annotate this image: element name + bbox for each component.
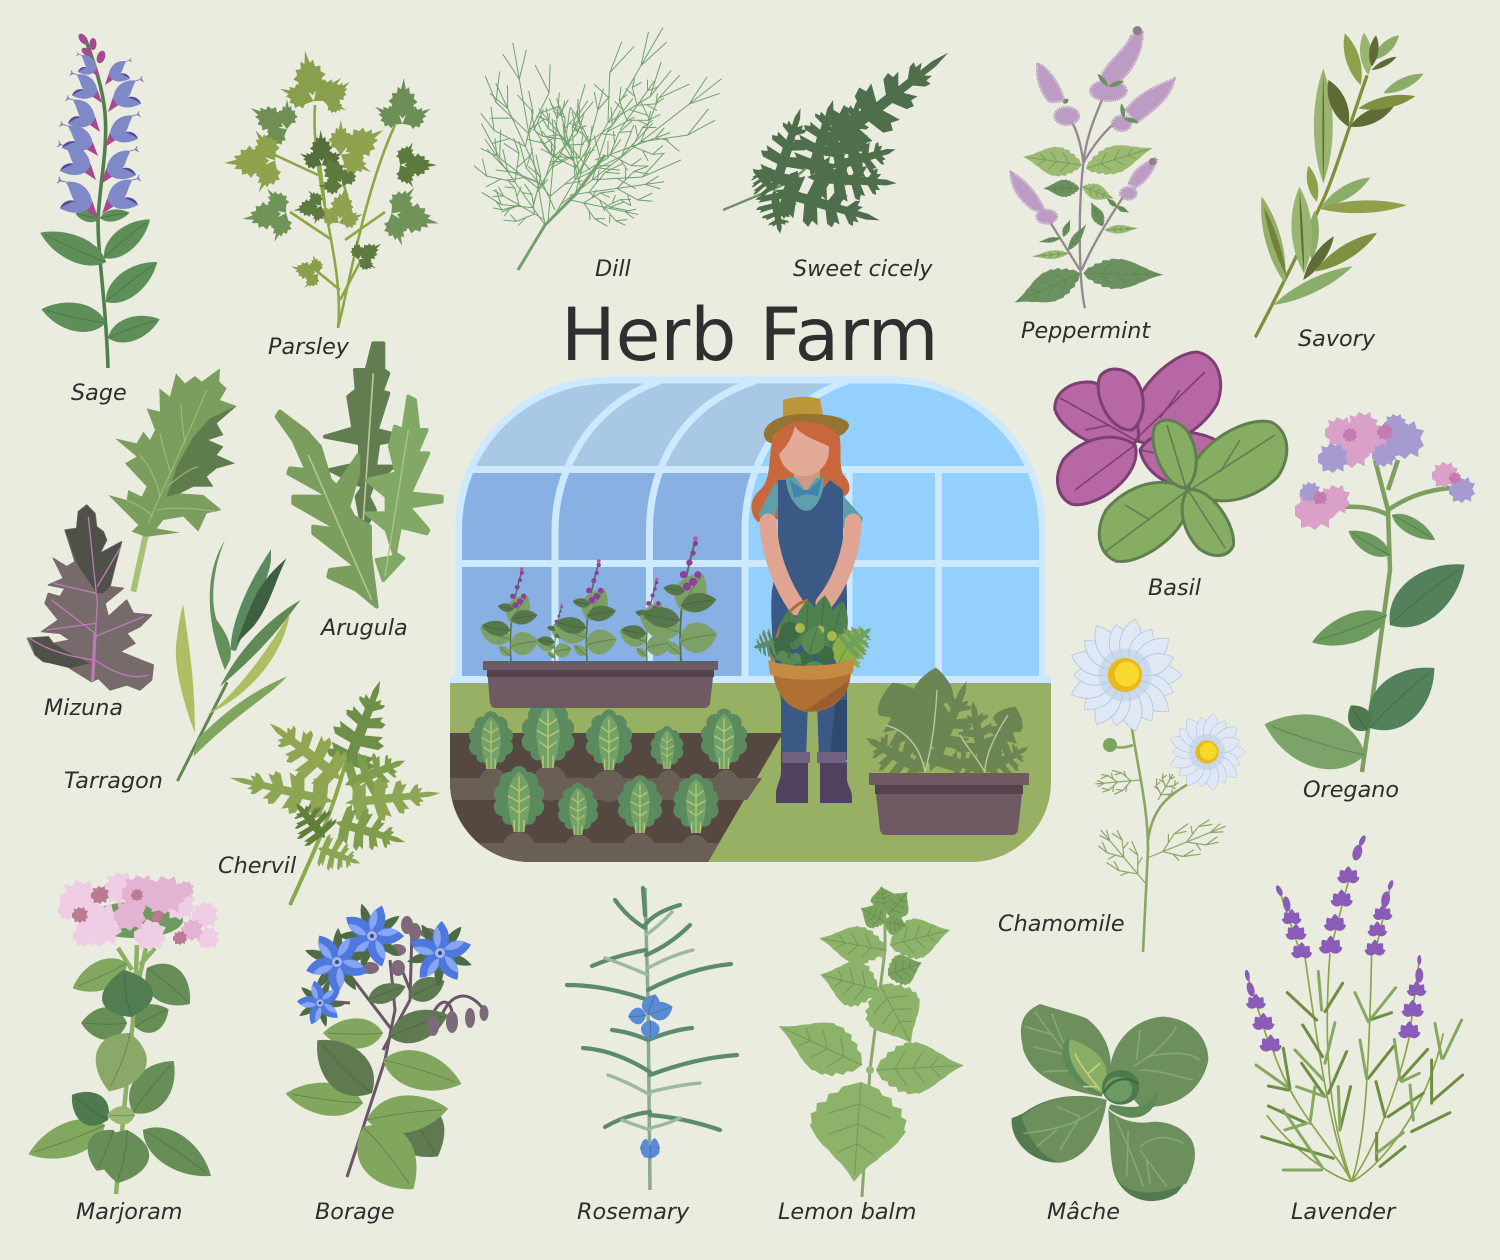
label: Lemon balm: Lemon balm bbox=[778, 1199, 916, 1225]
plant: sweet cicely bbox=[723, 31, 965, 245]
plant: lavender bbox=[1244, 834, 1463, 1182]
flower spikes bbox=[1012, 33, 1173, 223]
farmer bbox=[752, 397, 863, 803]
planter with flowering herbs bbox=[476, 536, 720, 708]
label: Lavender: Lavender bbox=[1291, 1199, 1397, 1225]
plant: savory bbox=[1254, 31, 1426, 336]
leaves bbox=[1256, 972, 1463, 1170]
label: Savory: Savory bbox=[1298, 326, 1376, 352]
label: Basil: Basil bbox=[1148, 575, 1202, 601]
kale rows bbox=[469, 699, 747, 835]
plant: parsley bbox=[222, 44, 446, 328]
plant: chamomile bbox=[1068, 617, 1246, 952]
basket of greens bbox=[750, 594, 883, 712]
soil beds bbox=[450, 733, 783, 868]
plant: mizuna purple bbox=[27, 505, 153, 690]
label: Parsley: Parsley bbox=[268, 334, 350, 360]
plant: lemon balm bbox=[768, 883, 965, 1197]
label: Sage: Sage bbox=[71, 380, 127, 406]
greenhouse frame bbox=[450, 380, 1051, 680]
planter with salad greens bbox=[852, 665, 1039, 835]
plant: oregano bbox=[1257, 412, 1478, 780]
plant: chervil bbox=[225, 671, 443, 905]
label: Tarragon: Tarragon bbox=[64, 768, 163, 794]
label: Mâche: Mâche bbox=[1047, 1199, 1120, 1225]
plant: borage bbox=[284, 902, 488, 1205]
label: Chervil: Chervil bbox=[218, 853, 297, 879]
label: Sweet cicely: Sweet cicely bbox=[793, 256, 933, 282]
plant: rosemary bbox=[567, 888, 737, 1190]
ground bbox=[450, 683, 1051, 862]
lavender florets bbox=[1244, 834, 1428, 1053]
plant: dill bbox=[458, 8, 746, 270]
plant: basil bbox=[1044, 339, 1302, 574]
flower spike bbox=[57, 32, 144, 218]
label: Chamomile: Chamomile bbox=[998, 911, 1125, 937]
plant: sage bbox=[35, 32, 165, 368]
panel: greenhouse scene bbox=[450, 376, 1051, 868]
plant: mizuna green bbox=[108, 368, 237, 592]
plant: peppermint bbox=[1008, 26, 1173, 317]
plant: mâche bbox=[1012, 1004, 1208, 1201]
title: Herb Farm bbox=[561, 294, 939, 378]
label: Arugula: Arugula bbox=[319, 615, 408, 641]
plant: arugula bbox=[277, 343, 442, 607]
label: Mizuna: Mizuna bbox=[44, 695, 123, 721]
label: Dill: Dill bbox=[595, 256, 632, 282]
label: Peppermint: Peppermint bbox=[1021, 318, 1151, 344]
greenhouse glass bbox=[450, 376, 1050, 686]
label: Rosemary: Rosemary bbox=[577, 1199, 690, 1225]
label: Oregano: Oregano bbox=[1303, 777, 1399, 803]
plant: marjoram bbox=[23, 872, 221, 1194]
label: Borage: Borage bbox=[315, 1199, 395, 1225]
plant: tarragon bbox=[176, 540, 301, 780]
label: Marjoram: Marjoram bbox=[76, 1199, 182, 1225]
